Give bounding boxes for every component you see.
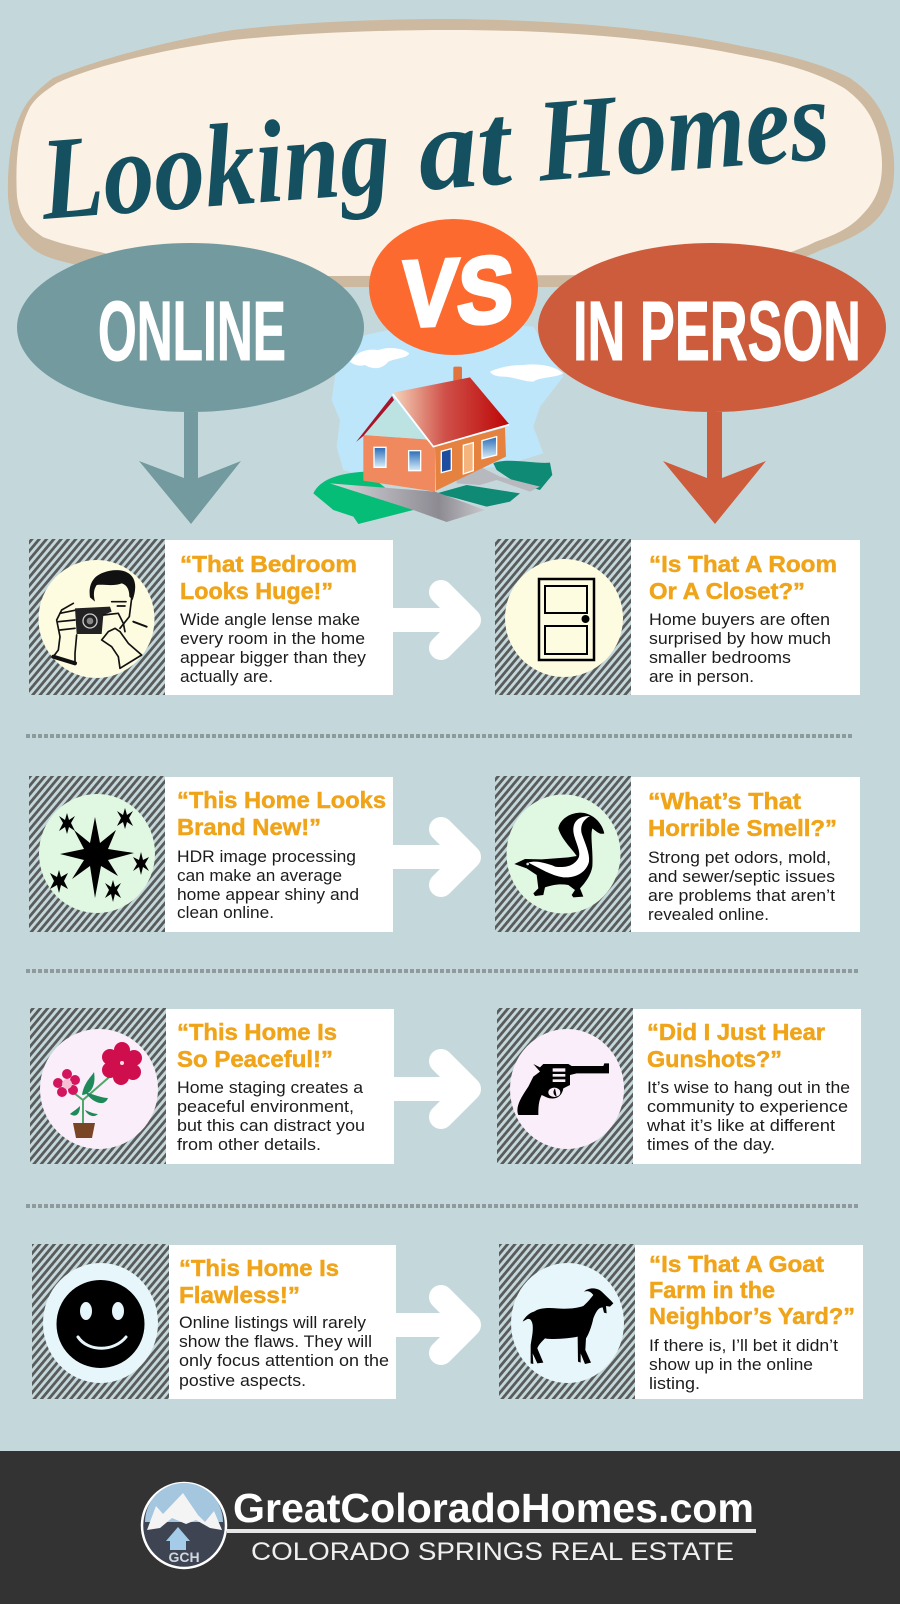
- body text: show the flaws. They will: [179, 1333, 372, 1351]
- body text: actually are.: [180, 668, 273, 686]
- body text: [177, 848, 359, 922]
- body text: appear bigger than they: [180, 649, 367, 667]
- card: flawless: [32, 1244, 396, 1399]
- title text: Homes: [532, 54, 834, 207]
- headline: Gunshots?”: [647, 1046, 782, 1072]
- left oval: online: [17, 243, 364, 412]
- body text: clean online.: [177, 904, 274, 922]
- title text: at: [413, 78, 518, 216]
- body text: can make an average: [177, 867, 342, 885]
- gable: [363, 397, 427, 439]
- icon: skunk: [506, 794, 620, 914]
- body text: [646, 1079, 850, 1154]
- roof: [393, 377, 509, 447]
- body text: home appear shiny and: [177, 886, 359, 904]
- body text: every room in the home: [180, 630, 365, 648]
- headline: Flawless!”: [179, 1282, 300, 1308]
- headline: Brand New!”: [177, 814, 321, 840]
- headline: Looks Huge!”: [180, 578, 333, 604]
- arrow: online down: [139, 412, 241, 524]
- card: room or closet: [495, 539, 860, 695]
- body text: Strong pet odors, mold,: [648, 849, 831, 867]
- arrow: row 2: [393, 829, 469, 885]
- arrow: row 3: [394, 1061, 469, 1117]
- body text: [180, 611, 367, 686]
- body text: show up in the online: [649, 1356, 813, 1374]
- vs text: VS: [399, 236, 516, 347]
- headline: “Did I Just Hear: [647, 1019, 825, 1045]
- headline: Farm in the: [649, 1277, 775, 1303]
- title text: Looking: [35, 87, 395, 245]
- icon: door: [505, 559, 623, 677]
- headline: “This Home Looks: [177, 787, 386, 813]
- site name: GreatColoradoHomes.com: [233, 1485, 754, 1531]
- sky: [332, 320, 563, 477]
- body text: If there is, I’ll bet it didn’t: [649, 1337, 838, 1355]
- headline: [180, 551, 357, 604]
- headline: “This Home Is: [177, 1019, 337, 1045]
- card: gunshots: [497, 1008, 861, 1164]
- logo: mountains: GCH: [168, 1549, 200, 1565]
- card: that bedroom: [29, 539, 393, 695]
- body text: are in person.: [649, 668, 754, 686]
- title text: [35, 54, 834, 245]
- body text: [649, 1337, 838, 1393]
- body text: Home buyers are often: [649, 611, 830, 629]
- body text: what it’s like at different: [646, 1117, 835, 1135]
- arrow: in person down: [663, 412, 766, 524]
- footer: [0, 1451, 900, 1604]
- headline: [648, 788, 837, 841]
- windows: [374, 437, 497, 474]
- body text: times of the day.: [647, 1136, 775, 1154]
- headline: [649, 551, 837, 604]
- icon: photographer: [38, 560, 154, 678]
- body text: surprised by how much: [649, 630, 831, 648]
- body text: [179, 1314, 389, 1390]
- body text: but this can distract you: [177, 1117, 365, 1135]
- arrow: row 1: [393, 592, 469, 648]
- lawn left: [313, 472, 413, 524]
- body text: listing.: [649, 1375, 700, 1393]
- body text: It’s wise to hang out in the: [647, 1079, 850, 1097]
- body text: [649, 611, 831, 686]
- logo: mountains: [142, 1483, 226, 1568]
- headline: [179, 1255, 339, 1308]
- vs badge: [369, 219, 538, 355]
- card: brand new: [29, 776, 393, 932]
- headline: “What’s That: [648, 788, 801, 814]
- icon: flower: [40, 1029, 158, 1149]
- body text: peaceful environment,: [177, 1098, 354, 1116]
- chimney: [453, 367, 462, 384]
- card: so peaceful: [30, 1008, 394, 1164]
- headline: “Is That A Goat: [649, 1251, 824, 1277]
- headline: So Peaceful!”: [177, 1046, 333, 1072]
- body text: community to experience: [647, 1098, 848, 1116]
- body text: are problems that aren’t: [648, 887, 835, 905]
- headline: Or A Closet?”: [649, 578, 805, 604]
- headline: Neighbor’s Yard?”: [649, 1303, 855, 1329]
- lawn right: [437, 461, 552, 507]
- headline: [177, 1019, 337, 1072]
- headline: [177, 787, 386, 840]
- headline: “Is That A Room: [649, 551, 837, 577]
- body text: HDR image processing: [177, 848, 356, 866]
- icon: smiley: [43, 1263, 158, 1383]
- body text: Wide angle lense make: [180, 611, 360, 629]
- arrow: row 4: [396, 1297, 469, 1353]
- body text: Home staging creates a: [177, 1079, 364, 1097]
- side wall: [435, 427, 506, 491]
- body text: from other details.: [177, 1136, 321, 1154]
- headline: [649, 1251, 855, 1329]
- icon: goat: [511, 1263, 624, 1383]
- body text: and sewer/septic issues: [648, 868, 835, 886]
- body text: postive aspects.: [179, 1372, 306, 1390]
- body text: [177, 1079, 365, 1154]
- card: goat farm: [499, 1244, 863, 1399]
- body text: revealed online.: [648, 906, 769, 924]
- house illustration: [313, 320, 563, 524]
- label: online: ONLINE: [98, 284, 286, 378]
- body text: [648, 849, 835, 924]
- title banner: [8, 19, 894, 287]
- headline: Horrible Smell?”: [648, 815, 837, 841]
- right oval: in person: [538, 243, 886, 412]
- headline: “This Home Is: [179, 1255, 339, 1281]
- driveway: [330, 483, 485, 522]
- tagline: COLORADO SPRINGS REAL ESTATE: [251, 1538, 734, 1566]
- headline: “That Bedroom: [180, 551, 357, 577]
- card: horrible smell: [495, 776, 860, 932]
- front wall: [363, 435, 435, 492]
- body text: only focus attention on the: [179, 1352, 389, 1370]
- body text: smaller bedrooms: [649, 649, 791, 667]
- headline: [647, 1019, 825, 1072]
- icon: revolver: [510, 1029, 624, 1149]
- body text: Online listings will rarely: [179, 1314, 367, 1332]
- clouds: [350, 348, 563, 382]
- icon: stars: [39, 794, 155, 913]
